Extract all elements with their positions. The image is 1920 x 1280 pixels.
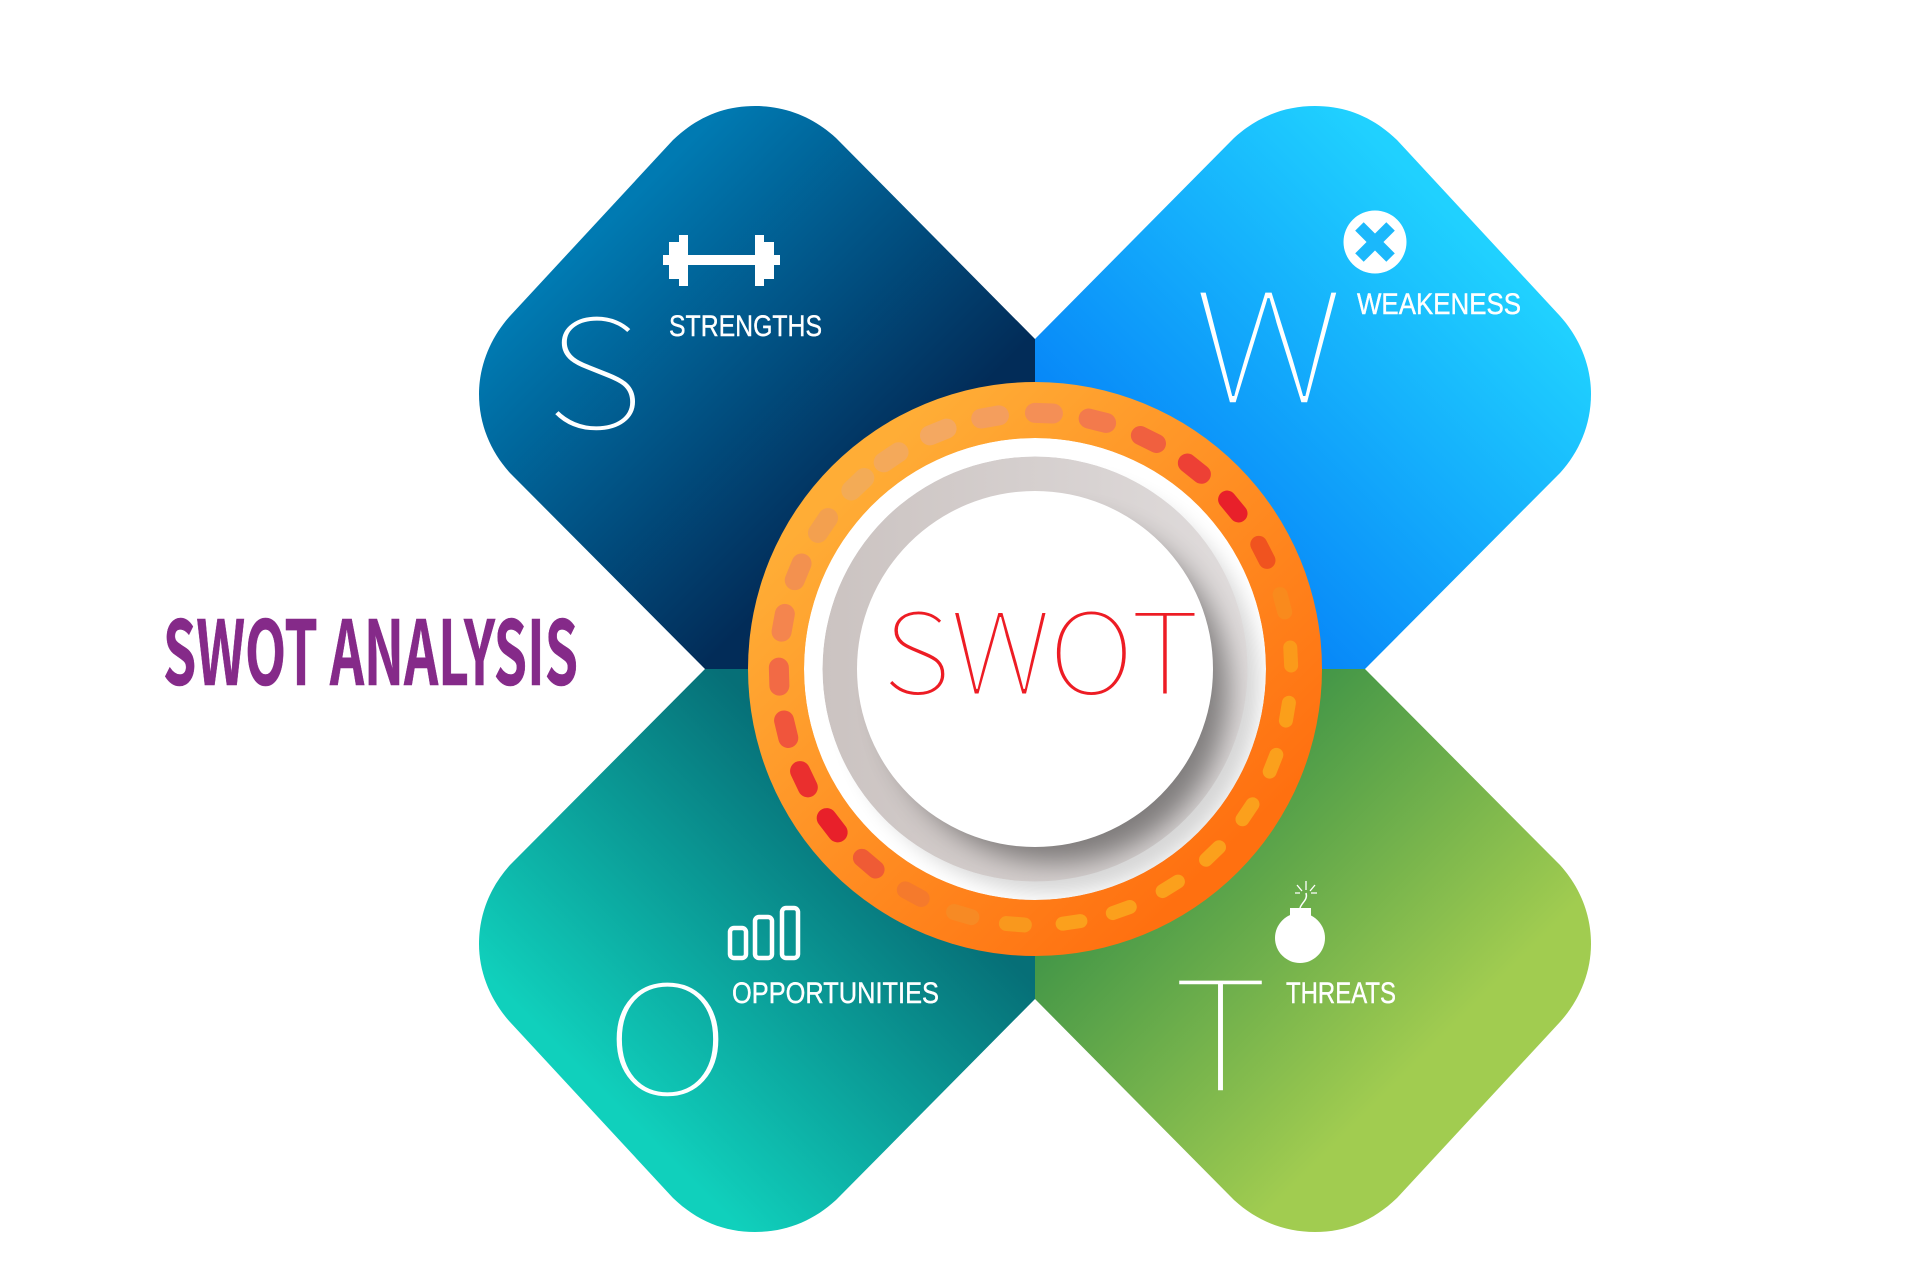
center dial: swot <box>748 382 1322 956</box>
orange ring <box>748 382 1322 956</box>
label: strengths: STRENGTHS <box>669 310 822 343</box>
icon: barbell <box>663 235 780 286</box>
grey ring <box>822 456 1248 882</box>
icon: bar chart <box>730 908 798 958</box>
label: threats: THREATS <box>1286 977 1396 1010</box>
panel: opportunities <box>479 669 1035 1232</box>
letter S: S <box>545 253 644 474</box>
label: weakeness: WEAKENESS <box>1357 288 1521 321</box>
title: SWOT ANALYSIS <box>163 582 578 711</box>
label: opportunities: OPPORTUNITIES <box>732 977 939 1010</box>
icon: bomb <box>1275 881 1325 963</box>
white ring with soft shadow <box>804 438 1266 900</box>
center word: SWOT: SWOT <box>883 565 1199 727</box>
letter T: T <box>1173 915 1268 1136</box>
panel: weakness <box>1035 106 1591 669</box>
letter O: O <box>605 919 730 1140</box>
panel: strengths <box>479 106 1035 669</box>
panel: threats <box>1035 669 1591 1232</box>
dashed ring <box>779 413 1291 925</box>
white center disc <box>857 491 1213 847</box>
letter W: W <box>1194 227 1344 448</box>
icon: x in circle <box>1344 210 1406 274</box>
